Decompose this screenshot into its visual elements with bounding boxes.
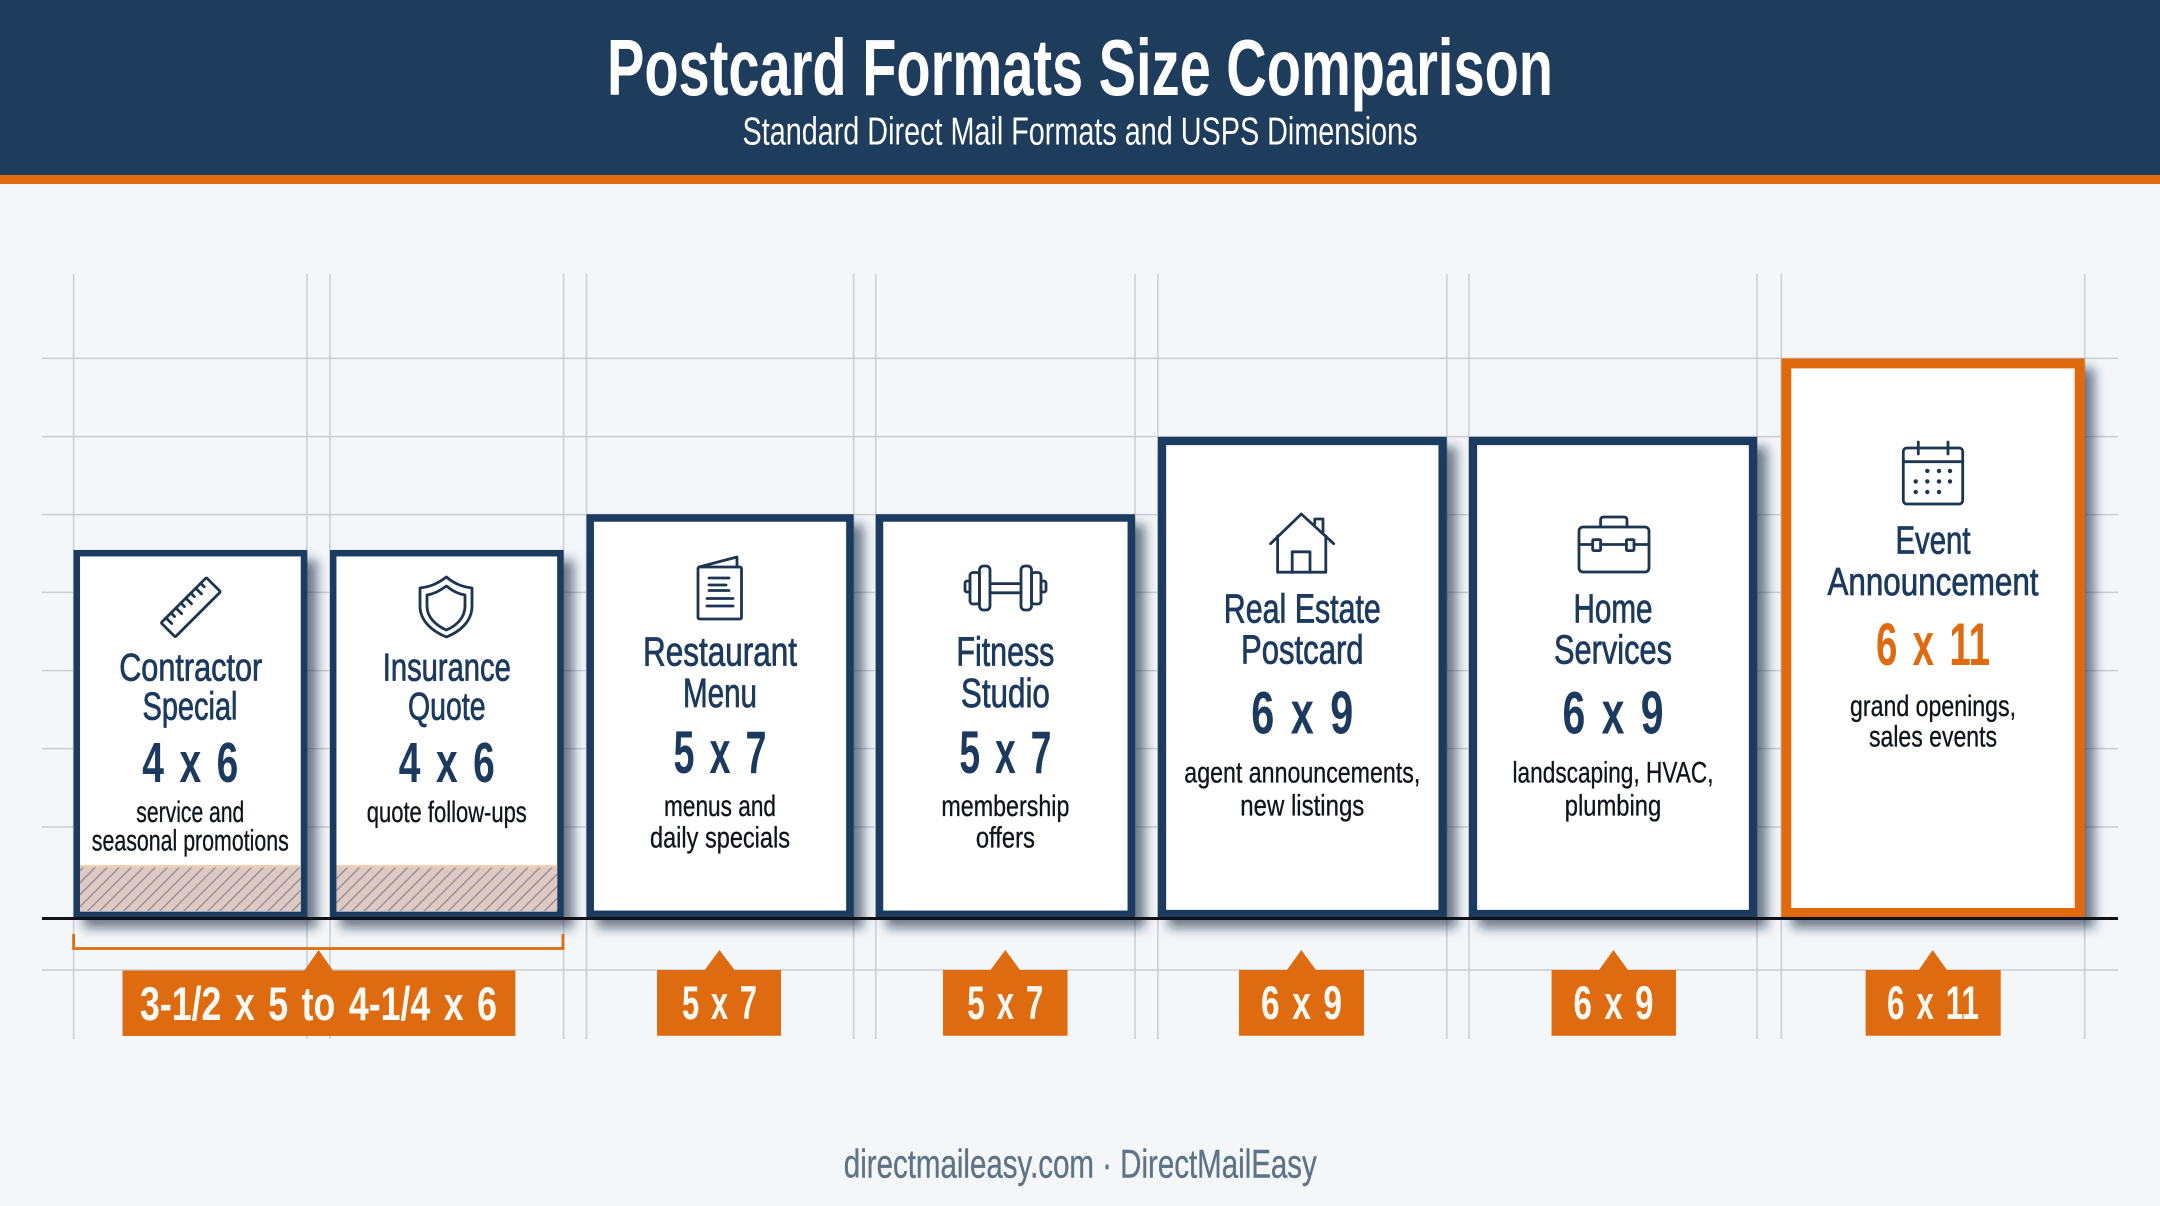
size: 5 x 7	[959, 719, 1051, 786]
card title: Home	[1574, 586, 1652, 632]
size: 6 x 9	[1251, 680, 1353, 746]
footer credit: directmaileasy.com · DirectMailEasy	[844, 1142, 1317, 1186]
icon: ruler	[161, 578, 220, 637]
icon: shield	[420, 577, 472, 637]
use description	[941, 790, 1069, 854]
tag: 3-1/2 x 5 to 4-1/4 x 6: 3-1/2 x 5 to 4-1/4 x 6	[140, 977, 497, 1030]
panel: Event Announcement card	[1786, 363, 2080, 913]
card title: Quote	[408, 686, 486, 728]
card title: Announcement	[1828, 561, 2039, 604]
tag: 6 x 9	[1552, 950, 1676, 1036]
card title: Menu	[683, 670, 757, 716]
card title	[119, 646, 262, 728]
header band	[0, 0, 2160, 184]
card title	[643, 628, 797, 716]
use description: grand openings,	[1850, 690, 2016, 723]
use description	[92, 796, 289, 858]
card title: Services	[1554, 626, 1672, 672]
card title: Restaurant	[643, 628, 797, 674]
tag: 5 x 7	[943, 950, 1068, 1036]
card title: Insurance	[383, 646, 511, 690]
use description: landscaping, HVAC,	[1512, 756, 1714, 790]
use description: seasonal promotions	[92, 824, 289, 858]
card title	[1224, 586, 1381, 672]
use description: agent announcements,	[1184, 756, 1420, 790]
panel: Fitness Studio card	[880, 518, 1131, 914]
card title	[956, 628, 1054, 716]
title: Postcard Formats Size Comparison	[607, 23, 1553, 112]
tag: 5 x 7: 5 x 7	[682, 976, 757, 1029]
use description: sales events	[1869, 720, 1997, 754]
use description: membership	[941, 790, 1069, 823]
tag: 5 x 7: 5 x 7	[967, 976, 1043, 1029]
card title: Fitness	[956, 628, 1054, 674]
panel: Contractor Special card	[77, 553, 304, 915]
clear zone hatch	[336, 865, 557, 911]
use description: offers	[976, 822, 1035, 854]
clear zone hatch	[80, 865, 301, 911]
use description: service and	[136, 796, 244, 829]
tag: 6 x 9: 6 x 9	[1574, 976, 1654, 1029]
card title: Postcard	[1241, 626, 1364, 672]
use description	[650, 790, 790, 854]
size: 4 x 6	[399, 731, 495, 795]
size: 4 x 6	[142, 731, 238, 795]
use description: quote follow-ups	[367, 796, 527, 829]
icon: house	[1270, 514, 1334, 572]
use description: plumbing	[1565, 790, 1661, 822]
card title: Real Estate	[1224, 586, 1381, 632]
panel: Restaurant Menu card	[590, 518, 850, 914]
size: 6 x 11	[1876, 611, 1990, 678]
subtitle: Standard Direct Mail Formats and USPS Dimensions	[742, 110, 1418, 154]
tag: 6 x 11: 6 x 11	[1887, 976, 1979, 1029]
card title: Event	[1896, 520, 1971, 562]
card title: Contractor	[119, 646, 262, 690]
card title	[383, 646, 511, 728]
tag: 6 x 9: 6 x 9	[1261, 976, 1342, 1029]
panel: Home Services card	[1473, 441, 1753, 914]
bracket: 4x6 range	[74, 934, 563, 948]
tag: 5 x 7	[657, 950, 781, 1036]
icon: menu	[698, 557, 742, 619]
tag: 3-1/2 x 5 to 4-1/4 x 6	[122, 950, 515, 1036]
use description	[1512, 756, 1714, 822]
size: 6 x 9	[1562, 680, 1664, 746]
icon: dumbbell	[965, 566, 1046, 610]
use description: new listings	[1240, 790, 1364, 822]
tag: 6 x 11	[1866, 950, 2001, 1036]
use description	[1184, 756, 1420, 822]
baseline	[42, 917, 2118, 920]
card title	[1828, 520, 2039, 604]
use description: daily specials	[650, 822, 790, 854]
use description: menus and	[664, 790, 776, 823]
card title: Special	[142, 686, 238, 728]
card title	[1554, 586, 1672, 672]
icon: briefcase	[1579, 517, 1649, 572]
card title: Studio	[961, 670, 1050, 716]
use description	[1850, 690, 2016, 754]
tag: 6 x 9	[1239, 950, 1364, 1036]
panel: Real Estate Postcard card	[1162, 441, 1443, 914]
size: 5 x 7	[674, 719, 766, 786]
panel: Insurance Quote card	[333, 553, 560, 915]
icon: calendar	[1903, 442, 1963, 504]
